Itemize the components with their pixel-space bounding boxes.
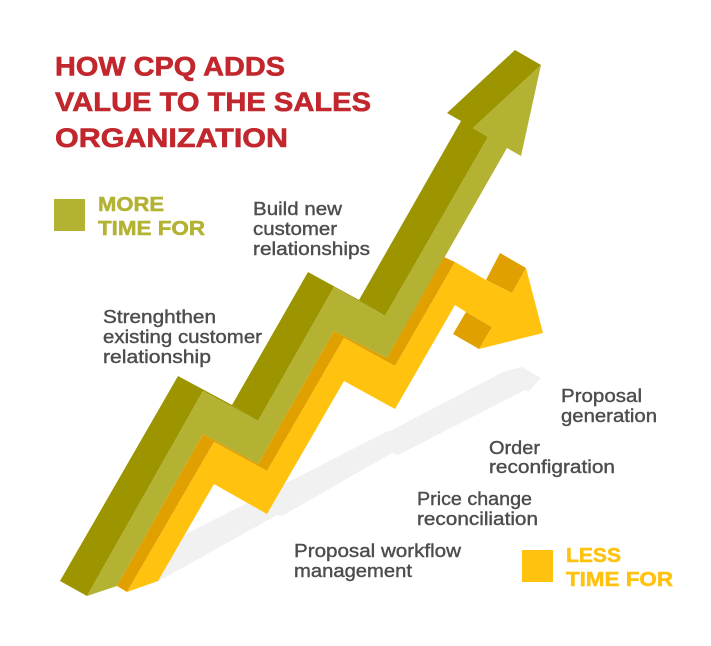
less time for label — [566, 544, 673, 591]
label: proposal generation: Proposal — [561, 385, 642, 406]
olive arrow side faces — [60, 50, 541, 596]
title — [55, 52, 371, 153]
label: proposal workflow management: Proposal workflow — [294, 540, 462, 561]
legend: less time for — [522, 544, 673, 591]
yellow arrow side faces — [117, 253, 526, 592]
title: VALUE TO THE SALES — [55, 87, 371, 117]
label: proposal workflow management: management — [294, 560, 412, 581]
label: price change reconciliation: Price change — [417, 488, 532, 509]
label: build new customer relationships: customer — [253, 218, 337, 239]
label: strengthen existing customer relationship: Strenghthen — [103, 306, 216, 327]
more time for label — [98, 193, 205, 240]
yellow legend square — [522, 550, 553, 582]
label: proposal workflow management — [294, 540, 462, 581]
yellow arrow front face — [127, 262, 543, 592]
title: ORGANIZATION — [55, 123, 288, 153]
arrow: less time for (yellow, flattening) — [117, 253, 543, 592]
label: order reconfigration: reconfigration — [489, 456, 615, 477]
label: order reconfigration — [489, 437, 615, 477]
arrow: more time for (olive, rising) — [60, 50, 541, 596]
olive legend square — [54, 199, 85, 231]
label: strengthen existing customer relationship: existing customer — [103, 326, 262, 347]
label: build new customer relationships — [253, 198, 370, 259]
less time for label: LESS — [566, 544, 621, 567]
label: build new customer relationships: Build new — [253, 198, 343, 219]
label: proposal generation — [561, 385, 657, 426]
label: strengthen existing customer relationship — [103, 306, 262, 367]
olive arrow front face — [87, 65, 541, 596]
label: price change reconciliation: reconciliation — [417, 508, 538, 529]
legend: more time for — [54, 193, 205, 240]
less time for label: TIME FOR — [566, 568, 673, 591]
label: strengthen existing customer relationship: relationship — [103, 346, 211, 367]
label: order reconfigration: Order — [489, 437, 540, 458]
label: price change reconciliation — [417, 488, 538, 529]
title: HOW CPQ ADDS — [55, 52, 285, 82]
more time for label: TIME FOR — [98, 217, 205, 240]
more time for label: MORE — [98, 193, 164, 216]
arrow shadow — [157, 367, 541, 582]
label: build new customer relationships: relationships — [253, 238, 370, 259]
label: proposal generation: generation — [561, 405, 657, 426]
